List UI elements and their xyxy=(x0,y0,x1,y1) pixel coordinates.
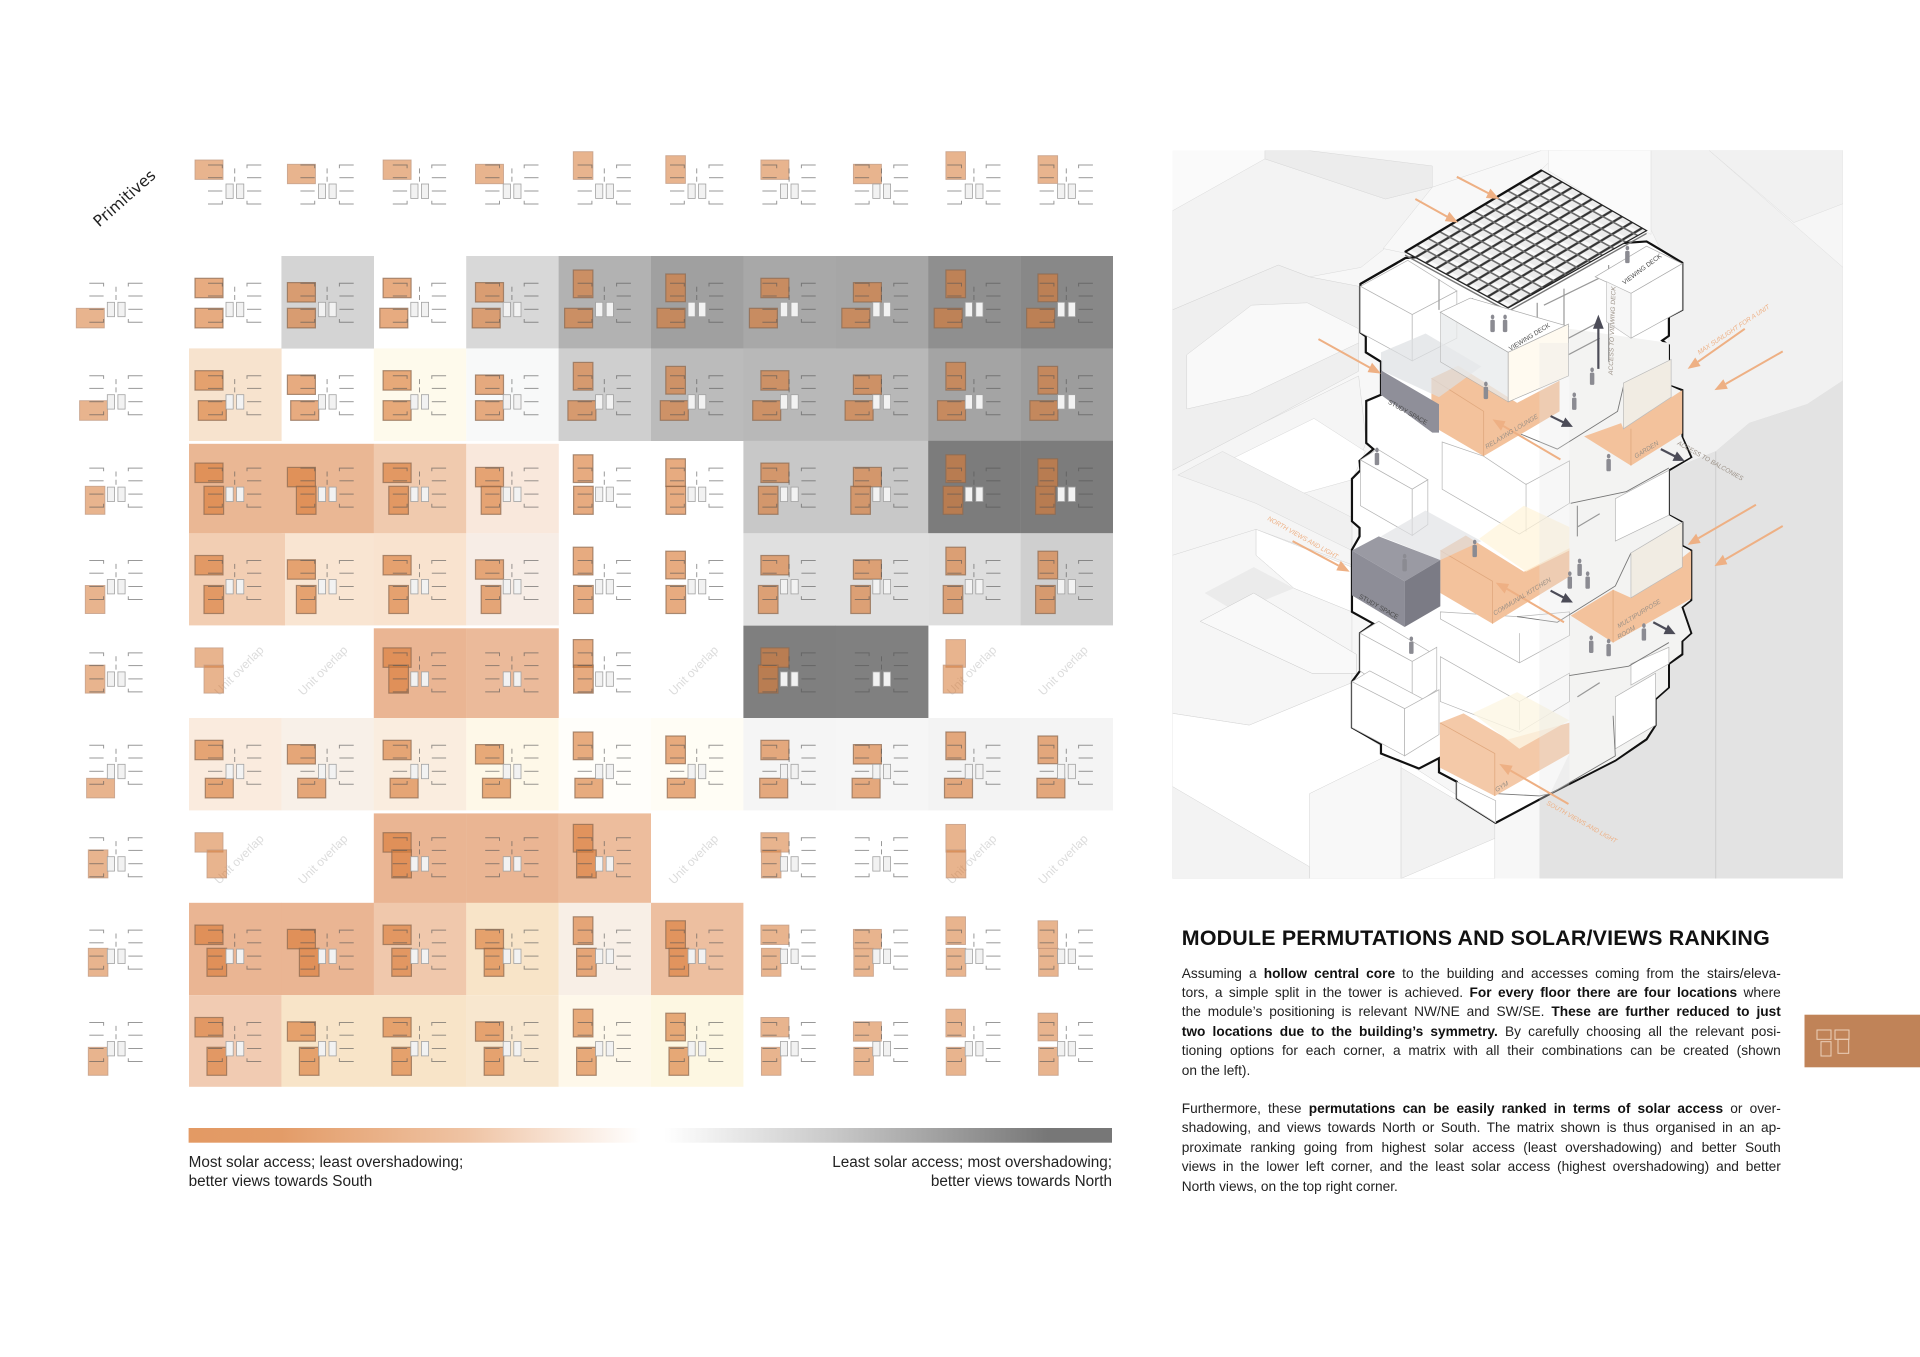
orange module: multipurpose room xyxy=(1571,522,1691,643)
translucent vertical band xyxy=(1539,343,1569,801)
orange module: gym xyxy=(1440,692,1569,796)
central viewing deck box xyxy=(1440,298,1568,402)
caption: north end of scale xyxy=(832,1154,1112,1190)
paragraph 2: shadowing, and views towards North or South. The matrix shown is thus organised in an ap- xyxy=(1182,1120,1781,1135)
diagram labels: MULTIPURPOSE xyxy=(1616,598,1663,630)
side tab with icon xyxy=(1804,1015,1920,1067)
right viewing deck box xyxy=(1595,246,1682,338)
matrix row 5 with unit overlaps: Unit overlap xyxy=(211,643,267,698)
dark circulation arrows xyxy=(1551,315,1685,634)
caption: south end of scale xyxy=(189,1154,463,1190)
diagram labels: VIEWING DECK xyxy=(1621,252,1664,287)
diagram labels: COMMUNAL KITCHEN xyxy=(1492,576,1553,617)
matrix row 3 xyxy=(189,441,1113,533)
white module blocks xyxy=(1352,260,1669,823)
caption: north end of scale: better views towards North xyxy=(931,1173,1112,1190)
matrix row 7 with unit overlaps: Unit overlap xyxy=(944,832,1000,887)
diagram labels: STUDY SPACE xyxy=(1387,399,1428,427)
heading: MODULE PERMUTATIONS AND SOLAR/VIEWS RANKING xyxy=(1182,926,1770,950)
column primitives row xyxy=(195,152,1093,204)
diagram labels: NORTH VIEWS AND LIGHT xyxy=(1266,515,1340,561)
solar roof canopy xyxy=(1405,170,1647,311)
diagram labels: RELAXING LOUNGE xyxy=(1484,413,1540,451)
matrix row 7 with unit overlaps: Unit overlap xyxy=(1036,832,1091,887)
diagram labels: ACCESS TO BALCONIES xyxy=(1675,439,1745,483)
matrix row 5 with unit overlaps xyxy=(195,626,1091,718)
matrix row 2 xyxy=(189,348,1113,441)
paragraph 1: Assuming a hollow central core to the building and accesses coming from the stairs/eleva- xyxy=(1182,966,1781,981)
caption: south end of scale: better views towards South xyxy=(189,1173,372,1190)
diagram labels: VIEWING DECK xyxy=(1508,322,1552,353)
orange module: communal kitchen xyxy=(1440,535,1569,624)
orange sunlight and view arrows xyxy=(1293,177,1783,804)
paragraph 1: two locations due to the building’s symmetry. By carefully choosing all the relevant posi- xyxy=(1182,1024,1781,1039)
matrix row 5 with unit overlaps: Unit overlap xyxy=(666,643,721,698)
lower study space cube xyxy=(1352,510,1481,627)
paragraph 2 xyxy=(1182,1101,1781,1194)
matrix row 7 with unit overlaps: Unit overlap xyxy=(295,832,351,887)
balcony edges xyxy=(1495,383,1669,796)
matrix row 5 with unit overlaps: Unit overlap xyxy=(295,643,351,698)
translucent box above kitchen xyxy=(1479,506,1569,572)
label: Primitives: Primitives xyxy=(90,166,159,231)
paragraph 1: the module’s positioning is relevant NW/NE and SW/SE. These are further reduced to just xyxy=(1182,1004,1781,1019)
roof top edge over deck xyxy=(1360,258,1406,284)
gradient legend bar xyxy=(189,1128,1112,1143)
paragraph 1 xyxy=(1182,966,1781,1078)
paragraph 2: North views, on the top right corner. xyxy=(1182,1179,1398,1194)
diagram labels: ROOM xyxy=(1616,624,1637,641)
caption: north end of scale: Least solar access; most overshadowing; xyxy=(832,1154,1112,1170)
axonometric building diagram xyxy=(1172,150,1843,879)
matrix row 9 xyxy=(189,995,1093,1087)
matrix row 5 with unit overlaps: Unit overlap xyxy=(1036,643,1091,698)
matrix row 6 xyxy=(189,718,1113,810)
icon: modules xyxy=(1817,1030,1849,1056)
matrix row 7 with unit overlaps xyxy=(195,813,1091,903)
orange module: relaxing lounge xyxy=(1431,366,1560,456)
diagram labels: GYM xyxy=(1494,780,1510,794)
matrix row 7 with unit overlaps: Unit overlap xyxy=(666,832,721,887)
diagram labels: MAX SUNLIGHT FOR A UNIT xyxy=(1697,303,1772,356)
roof supports and core lines xyxy=(1439,265,1609,697)
diagram labels: ACCESS TO VIEWING DECK xyxy=(1608,286,1618,376)
diagram labels: STUDY SPACE xyxy=(1358,593,1399,621)
paragraph 1: tioning options for each corner, a matrix with all their combinations can be created (shown xyxy=(1182,1043,1781,1058)
matrix row 5 with unit overlaps: Unit overlap xyxy=(944,643,1000,698)
tower outline xyxy=(1352,241,1691,823)
caption: south end of scale: Most solar access; least overshadowing; xyxy=(189,1154,463,1170)
paragraph 2: proximate ranking going from highest solar access (least overshadowing) and better South xyxy=(1182,1140,1781,1155)
paragraph 2: Furthermore, these permutations can be easily ranked in terms of solar access or over- xyxy=(1182,1101,1781,1116)
diagram labels: SOUTH VIEWS AND LIGHT xyxy=(1545,800,1619,846)
people figures xyxy=(1375,246,1646,656)
orange module: garden xyxy=(1584,359,1682,466)
paragraph 1: on the left). xyxy=(1182,1063,1250,1078)
paragraph 1: tors, a simple split in the tower is achieved. For every floor there are four locations where xyxy=(1182,985,1781,1000)
matrix row 1 xyxy=(195,256,1113,349)
permutation matrix xyxy=(189,256,1113,1087)
matrix row 4 xyxy=(189,533,1113,625)
diagram labels xyxy=(1266,252,1772,846)
matrix row 7 with unit overlaps: Unit overlap xyxy=(211,832,267,887)
row primitives column xyxy=(76,283,143,1075)
matrix row 8 xyxy=(189,903,1093,995)
diagram labels: GARDEN xyxy=(1633,440,1660,460)
right wing floor xyxy=(1551,329,1690,793)
drawing background blocks xyxy=(1172,150,1843,879)
paragraph 2: views in the lower left corner, and the least solar access (highest overshadowing) and better xyxy=(1182,1159,1781,1174)
upper study space xyxy=(1381,333,1481,433)
